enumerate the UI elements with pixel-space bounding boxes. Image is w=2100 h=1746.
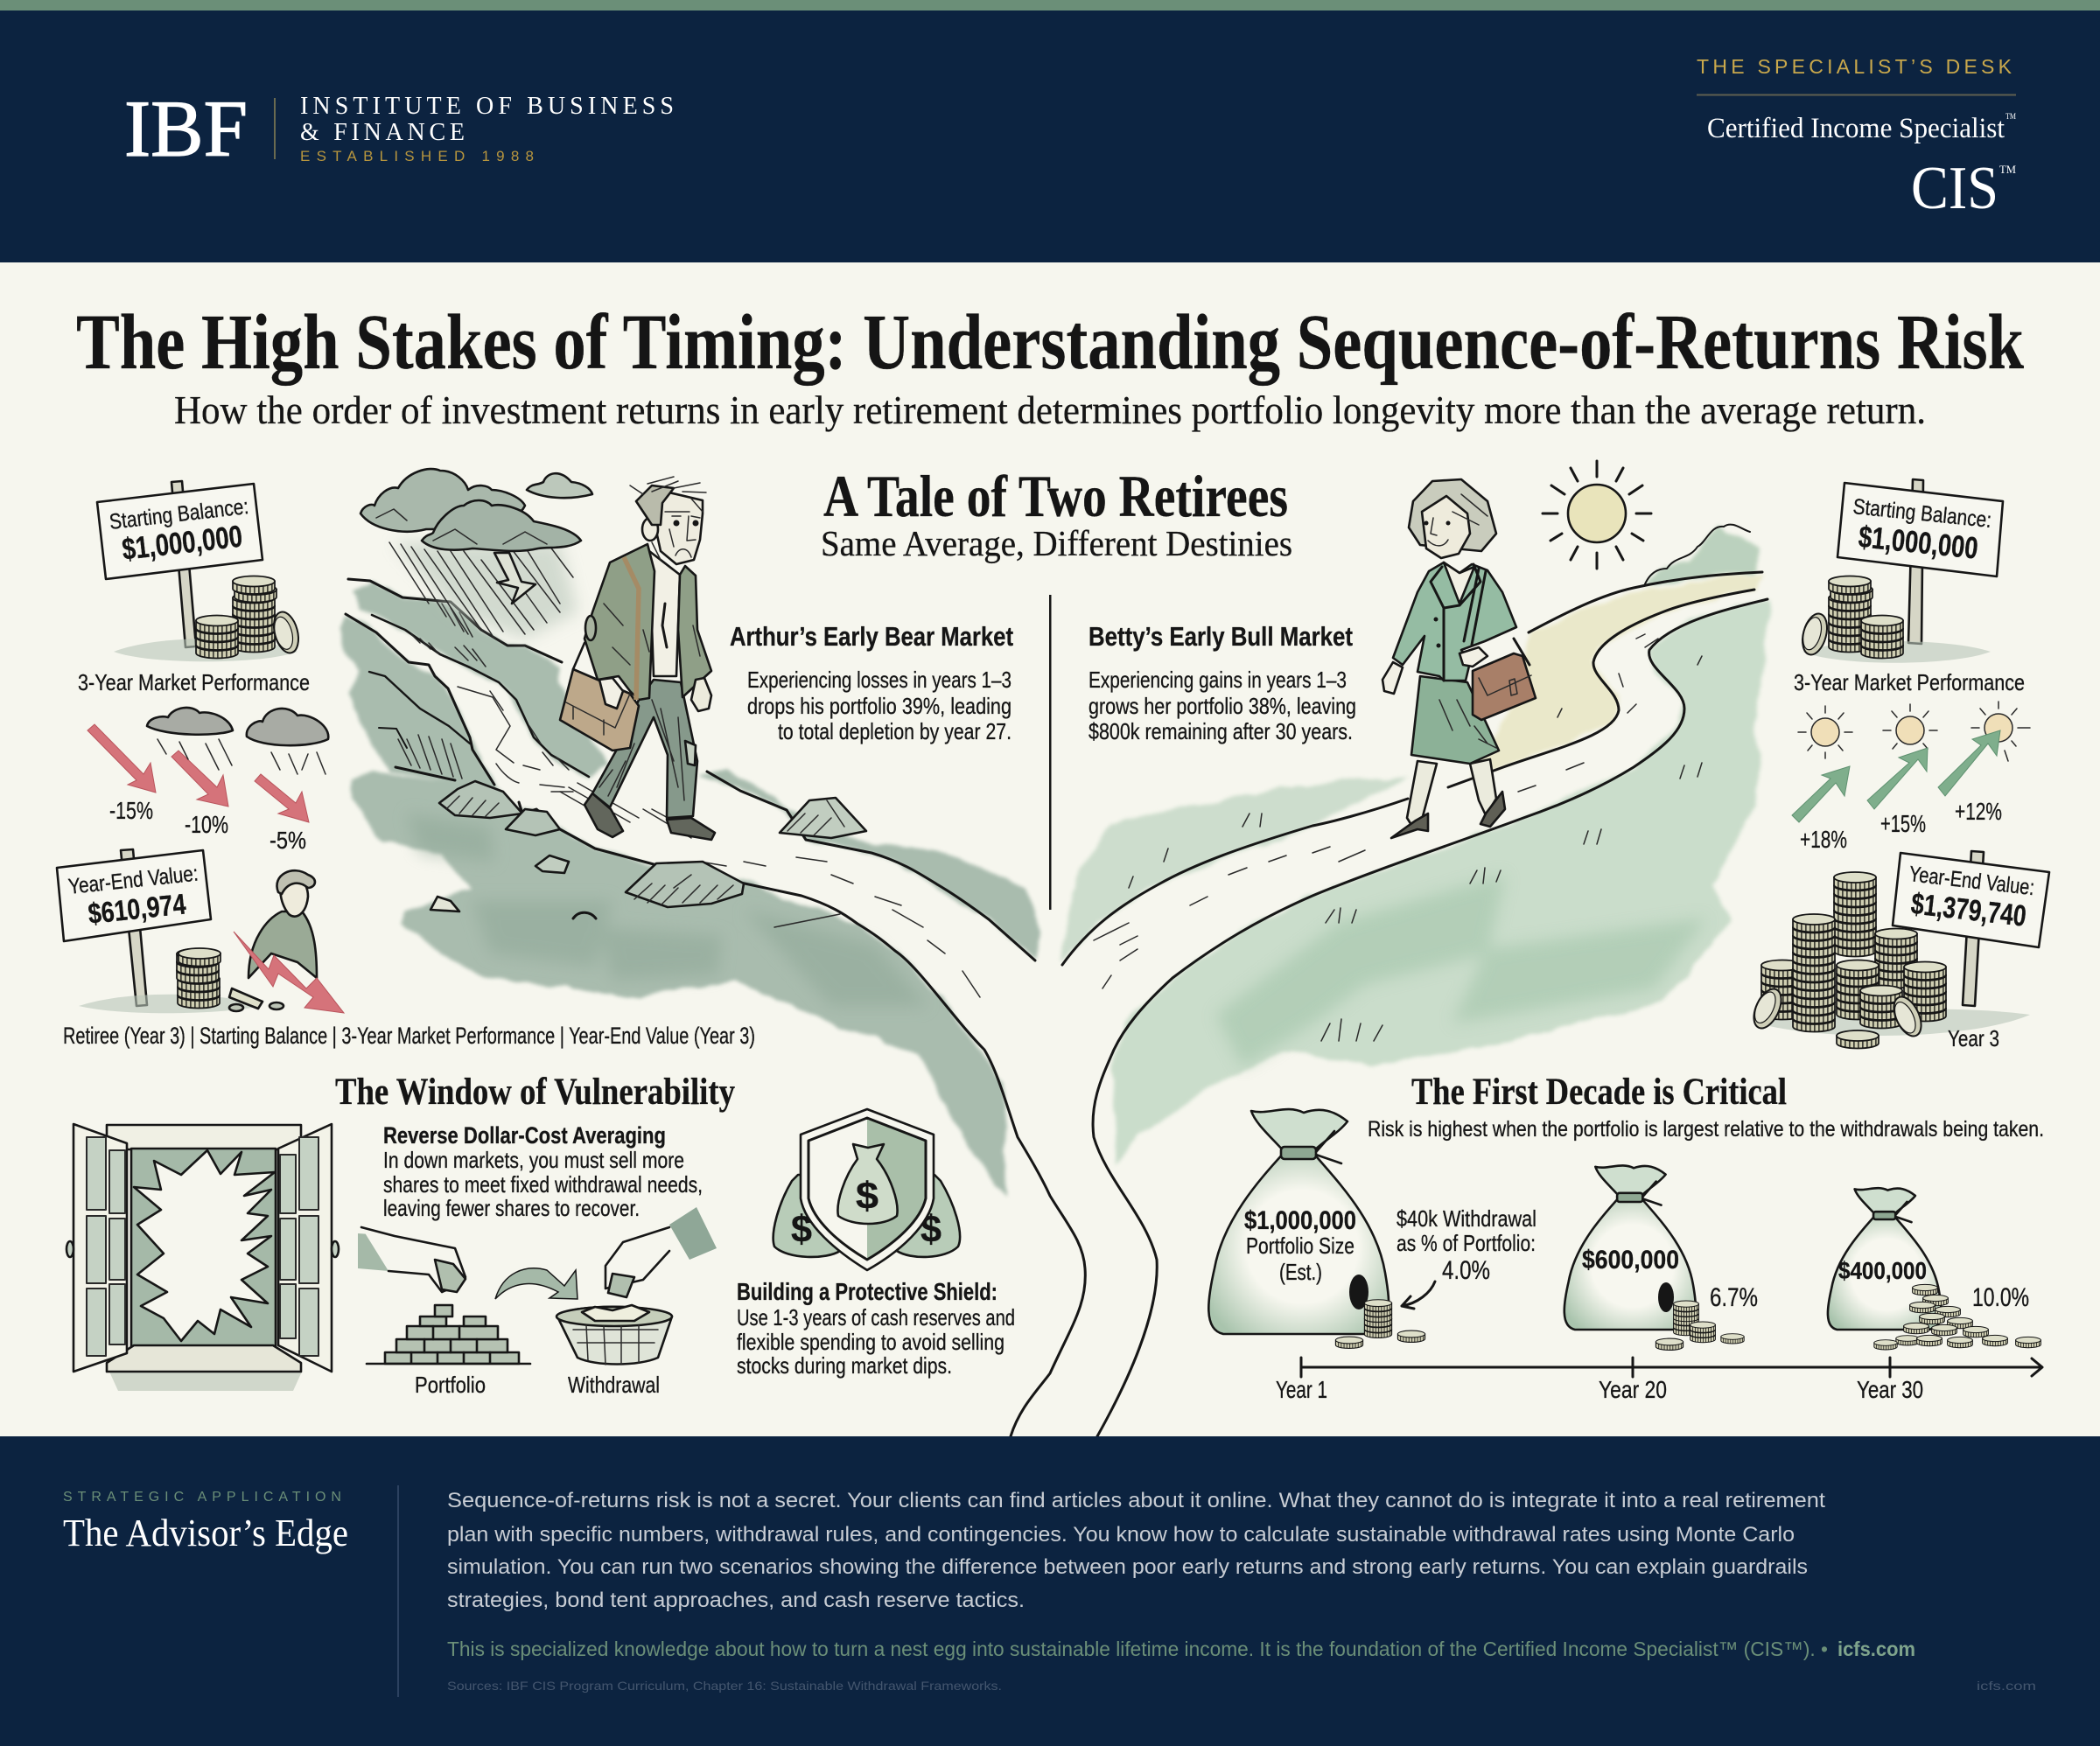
- sign: starting balance: $1,000,000: [120, 520, 244, 567]
- callout: withdrawal percent: $40k Withdrawal: [1396, 1205, 1536, 1232]
- footer label and heading: The Advisor’s Edge: [63, 1512, 348, 1554]
- subtitle: How the order of investment returns in early retirement determines portfolio longevity more than the average return.: [174, 388, 1926, 432]
- money bag: year 1: [1208, 1109, 1425, 1348]
- sign: year-end value: $610,974: [87, 887, 188, 930]
- red zigzag arrow: [234, 932, 344, 1013]
- sign: starting balance: [97, 481, 262, 647]
- footer closing line: icfs.com: [1838, 1638, 1915, 1660]
- betty's annual returns: +15%: [1880, 810, 1926, 837]
- arthur's story text: [730, 621, 1013, 744]
- money bag: year 30: $400,000: [1838, 1257, 1927, 1284]
- sign: starting balance: Starting Balance:: [1852, 494, 1992, 533]
- watercolor terrain: Arthur: [339, 581, 1038, 1197]
- text: building a protective shield: flexible spending to avoid selling: [737, 1329, 1004, 1355]
- text: reverse dollar-cost averaging: leaving fewer shares to recover.: [383, 1195, 640, 1221]
- timeline: Year 1: [1276, 1376, 1327, 1403]
- right column: Betty's numbers: [1748, 479, 2049, 1051]
- section heading: a tale of two retirees: A Tale of Two Retirees: [823, 463, 1288, 529]
- icon: protective shield and money bags: $: [856, 1175, 878, 1218]
- footer closing line: This is specialized knowledge about how to turn a nest egg into sustainable lifetime income. It is the foundation of the Certified Income Specialist™ (CIS™). •: [447, 1638, 1828, 1660]
- arthur's story text: Arthur’s Early Bear Market: [730, 621, 1013, 652]
- arrow: portfolio to withdrawal: [495, 1268, 578, 1299]
- footer paragraph: Sequence-of-returns risk is not a secret. Your clients can find articles about it online. What they cannot do is integrate it into a real retirement: [447, 1489, 1825, 1512]
- header band: [0, 10, 2100, 262]
- sign: year-end value: Year-End Value:: [1908, 862, 2036, 900]
- money bag: year 20: 6.7%: [1710, 1283, 1758, 1312]
- footer paragraph: simulation. You can run two scenarios showing the difference between poor early returns and strong early returns. You can explain guardrails: [447, 1555, 1808, 1579]
- logo: IBF: IBF: [124, 84, 248, 173]
- money bag: year 20: $600,000: [1582, 1246, 1679, 1275]
- heading: The Window of Vulnerability: [335, 1072, 735, 1113]
- icon: right hand with block: [606, 1207, 717, 1297]
- section heading: a tale of two retirees: Same Average, Different Destinies: [821, 523, 1292, 563]
- coin piles: [1748, 872, 2030, 1048]
- text: reverse dollar-cost averaging: In down markets, you must sell more: [383, 1147, 684, 1173]
- money bag: year 1: $1,000,000: [1244, 1206, 1356, 1235]
- footer band: [0, 1436, 2100, 1746]
- timeline: Year 20: [1599, 1376, 1667, 1403]
- betty's annual returns: [1800, 798, 2002, 853]
- road dashes and grass tufts: [1094, 634, 1702, 1041]
- icon: withdrawal basket: [556, 1305, 672, 1365]
- callout: withdrawal percent: 4.0%: [1442, 1256, 1490, 1285]
- icon: protective shield and money bags: $: [791, 1208, 812, 1251]
- text: reverse dollar-cost averaging: [383, 1122, 703, 1221]
- text: reverse dollar-cost averaging: Reverse Dollar-Cost Averaging: [383, 1122, 666, 1149]
- coins: starting balance: [1798, 576, 1991, 663]
- money bag: year 30: 10.0%: [1972, 1283, 2029, 1312]
- credential block: CIS: [1911, 155, 1998, 222]
- timeline: [1276, 1358, 2042, 1403]
- ink: cliff and road lines: [346, 579, 1085, 1436]
- caption: retiree legend: Retiree (Year 3) | Starting Balance | 3-Year Market Performance | Year-End Value (Year 3): [63, 1023, 755, 1049]
- darker wash patches: Arthur: [407, 814, 928, 1006]
- arthur's story text: to total depletion by year 27.: [778, 718, 1012, 744]
- darker wash patches: Betty: [1216, 875, 1706, 1067]
- sign: year-end value: $1,379,740: [1909, 887, 2028, 933]
- footer paragraph: [447, 1489, 1825, 1612]
- arthur's annual returns: -5%: [270, 827, 306, 854]
- betty's story text: grows her portfolio 38%, leaving: [1088, 693, 1356, 719]
- money bag: year 1: Portfolio Size: [1246, 1233, 1354, 1259]
- footer label and heading: STRATEGIC APPLICATION: [63, 1490, 341, 1505]
- sign: starting balance: $1,000,000: [1857, 520, 1979, 566]
- betty's annual returns: +12%: [1955, 798, 2002, 825]
- red loss arrows and clouds: [88, 708, 328, 822]
- money bag: year 20: [1564, 1165, 1758, 1350]
- credential block: [1697, 55, 2016, 222]
- footer label and heading: [63, 1490, 348, 1554]
- illustration: Arthur's rocky road: [339, 469, 1085, 1436]
- top accent bar: [0, 0, 2100, 10]
- logo: IBF: [124, 84, 674, 173]
- footer paragraph: plan with specific numbers, withdrawal rules, and contingencies. You know how to calculate sustainable withdrawal rates using Monte Carlo: [447, 1523, 1795, 1547]
- betty's story text: $800k remaining after 30 years.: [1088, 718, 1353, 744]
- footer paragraph: strategies, bond tent approaches, and cash reserve tactics.: [447, 1589, 1025, 1612]
- illustration: Betty's smooth road: [1062, 461, 1769, 1436]
- label: 3-year market performance: 3-Year Market Performance: [78, 669, 310, 695]
- text: reverse dollar-cost averaging: shares to meet fixed withdrawal needs,: [383, 1171, 703, 1198]
- section: the first decade is critical: [1208, 1072, 2044, 1403]
- money bag: year 30: [1828, 1188, 2040, 1350]
- betty's story text: Betty’s Early Bull Market: [1088, 621, 1353, 652]
- credential block: THE SPECIALIST’S DESK: [1697, 55, 2012, 78]
- icon: portfolio pyramid: [367, 1305, 530, 1364]
- arthur's annual returns: [109, 797, 306, 854]
- icon: protective shield and money bags: [774, 1109, 960, 1270]
- label: portfolio: Portfolio: [415, 1372, 486, 1398]
- watercolor terrain: Betty: [1062, 525, 1769, 1166]
- coins: starting balance: [114, 576, 303, 661]
- arthur's story text: drops his portfolio 39%, leading: [747, 693, 1012, 719]
- credential block: TM: [1999, 163, 2016, 176]
- icon: broken window: [66, 1124, 339, 1391]
- betty's annual returns: +18%: [1800, 826, 1847, 853]
- section heading: a tale of two retirees: [821, 463, 1292, 563]
- logo: IBF: & FINANCE: [300, 119, 465, 146]
- betty's story text: Experiencing gains in years 1–3: [1088, 667, 1347, 693]
- text: building a protective shield: [737, 1278, 1015, 1379]
- sign: starting balance: Starting Balance:: [108, 494, 250, 534]
- figure: Arthur: [560, 477, 715, 840]
- logo: IBF: ESTABLISHED 1988: [300, 148, 534, 164]
- figure: Betty: [1382, 479, 1536, 838]
- left column: Arthur's numbers: [57, 481, 755, 1049]
- sign: year-end value: [57, 849, 211, 1006]
- text: building a protective shield: Building a Protective Shield:: [737, 1278, 998, 1305]
- ink: stream marks and hatching: [398, 604, 980, 997]
- callout: withdrawal percent: as % of Portfolio:: [1396, 1230, 1536, 1256]
- credential block: Certified Income Specialist: [1707, 113, 2005, 144]
- money bag: year 1: (Est.): [1279, 1259, 1322, 1285]
- sign: year-end value: Year-End Value:: [67, 862, 200, 899]
- footer sources: Sources: IBF CIS Program Curriculum, Chapter 16: Sustainable Withdrawal Frameworks.: [447, 1679, 1002, 1693]
- footer url: icfs.com: [1977, 1679, 2036, 1693]
- arthur's story text: Experiencing losses in years 1–3: [747, 667, 1012, 693]
- callout: withdrawal percent: [1396, 1205, 1536, 1309]
- sign: starting balance: [1838, 479, 2003, 644]
- arthur's annual returns: -15%: [109, 797, 153, 824]
- icon: left hand with block: [358, 1227, 466, 1292]
- heading: The First Decade is Critical: [1411, 1072, 1787, 1113]
- section: the window of vulnerability: [66, 1072, 1015, 1398]
- logo: IBF: INSTITUTE OF BUSINESS: [300, 93, 674, 120]
- green gain arrows: [1792, 730, 2000, 822]
- sign: year-end value: [1893, 851, 2049, 1006]
- text: building a protective shield: stocks during market dips.: [737, 1352, 952, 1379]
- credential block: TM: [2006, 112, 2016, 121]
- text: building a protective shield: Use 1-3 years of cash reserves and: [737, 1304, 1015, 1330]
- betty's story text: [1088, 621, 1356, 744]
- sun: [1543, 461, 1651, 569]
- label: withdrawal: Withdrawal: [568, 1372, 660, 1398]
- label: year 3: Year 3: [1948, 1025, 1999, 1051]
- coins and worried retiree: [79, 870, 317, 1013]
- center divider: [1049, 595, 1052, 910]
- label: 3-year market performance: 3-Year Market Performance: [1794, 669, 2025, 695]
- icon: protective shield and money bags: $: [920, 1208, 942, 1251]
- timeline: Year 30: [1857, 1376, 1923, 1403]
- suns: [1798, 702, 2030, 761]
- rocks: [430, 781, 866, 918]
- arthur's annual returns: -10%: [185, 811, 228, 838]
- storm clouds and lightning: [360, 469, 592, 639]
- ink: road lines: [1062, 525, 1768, 1436]
